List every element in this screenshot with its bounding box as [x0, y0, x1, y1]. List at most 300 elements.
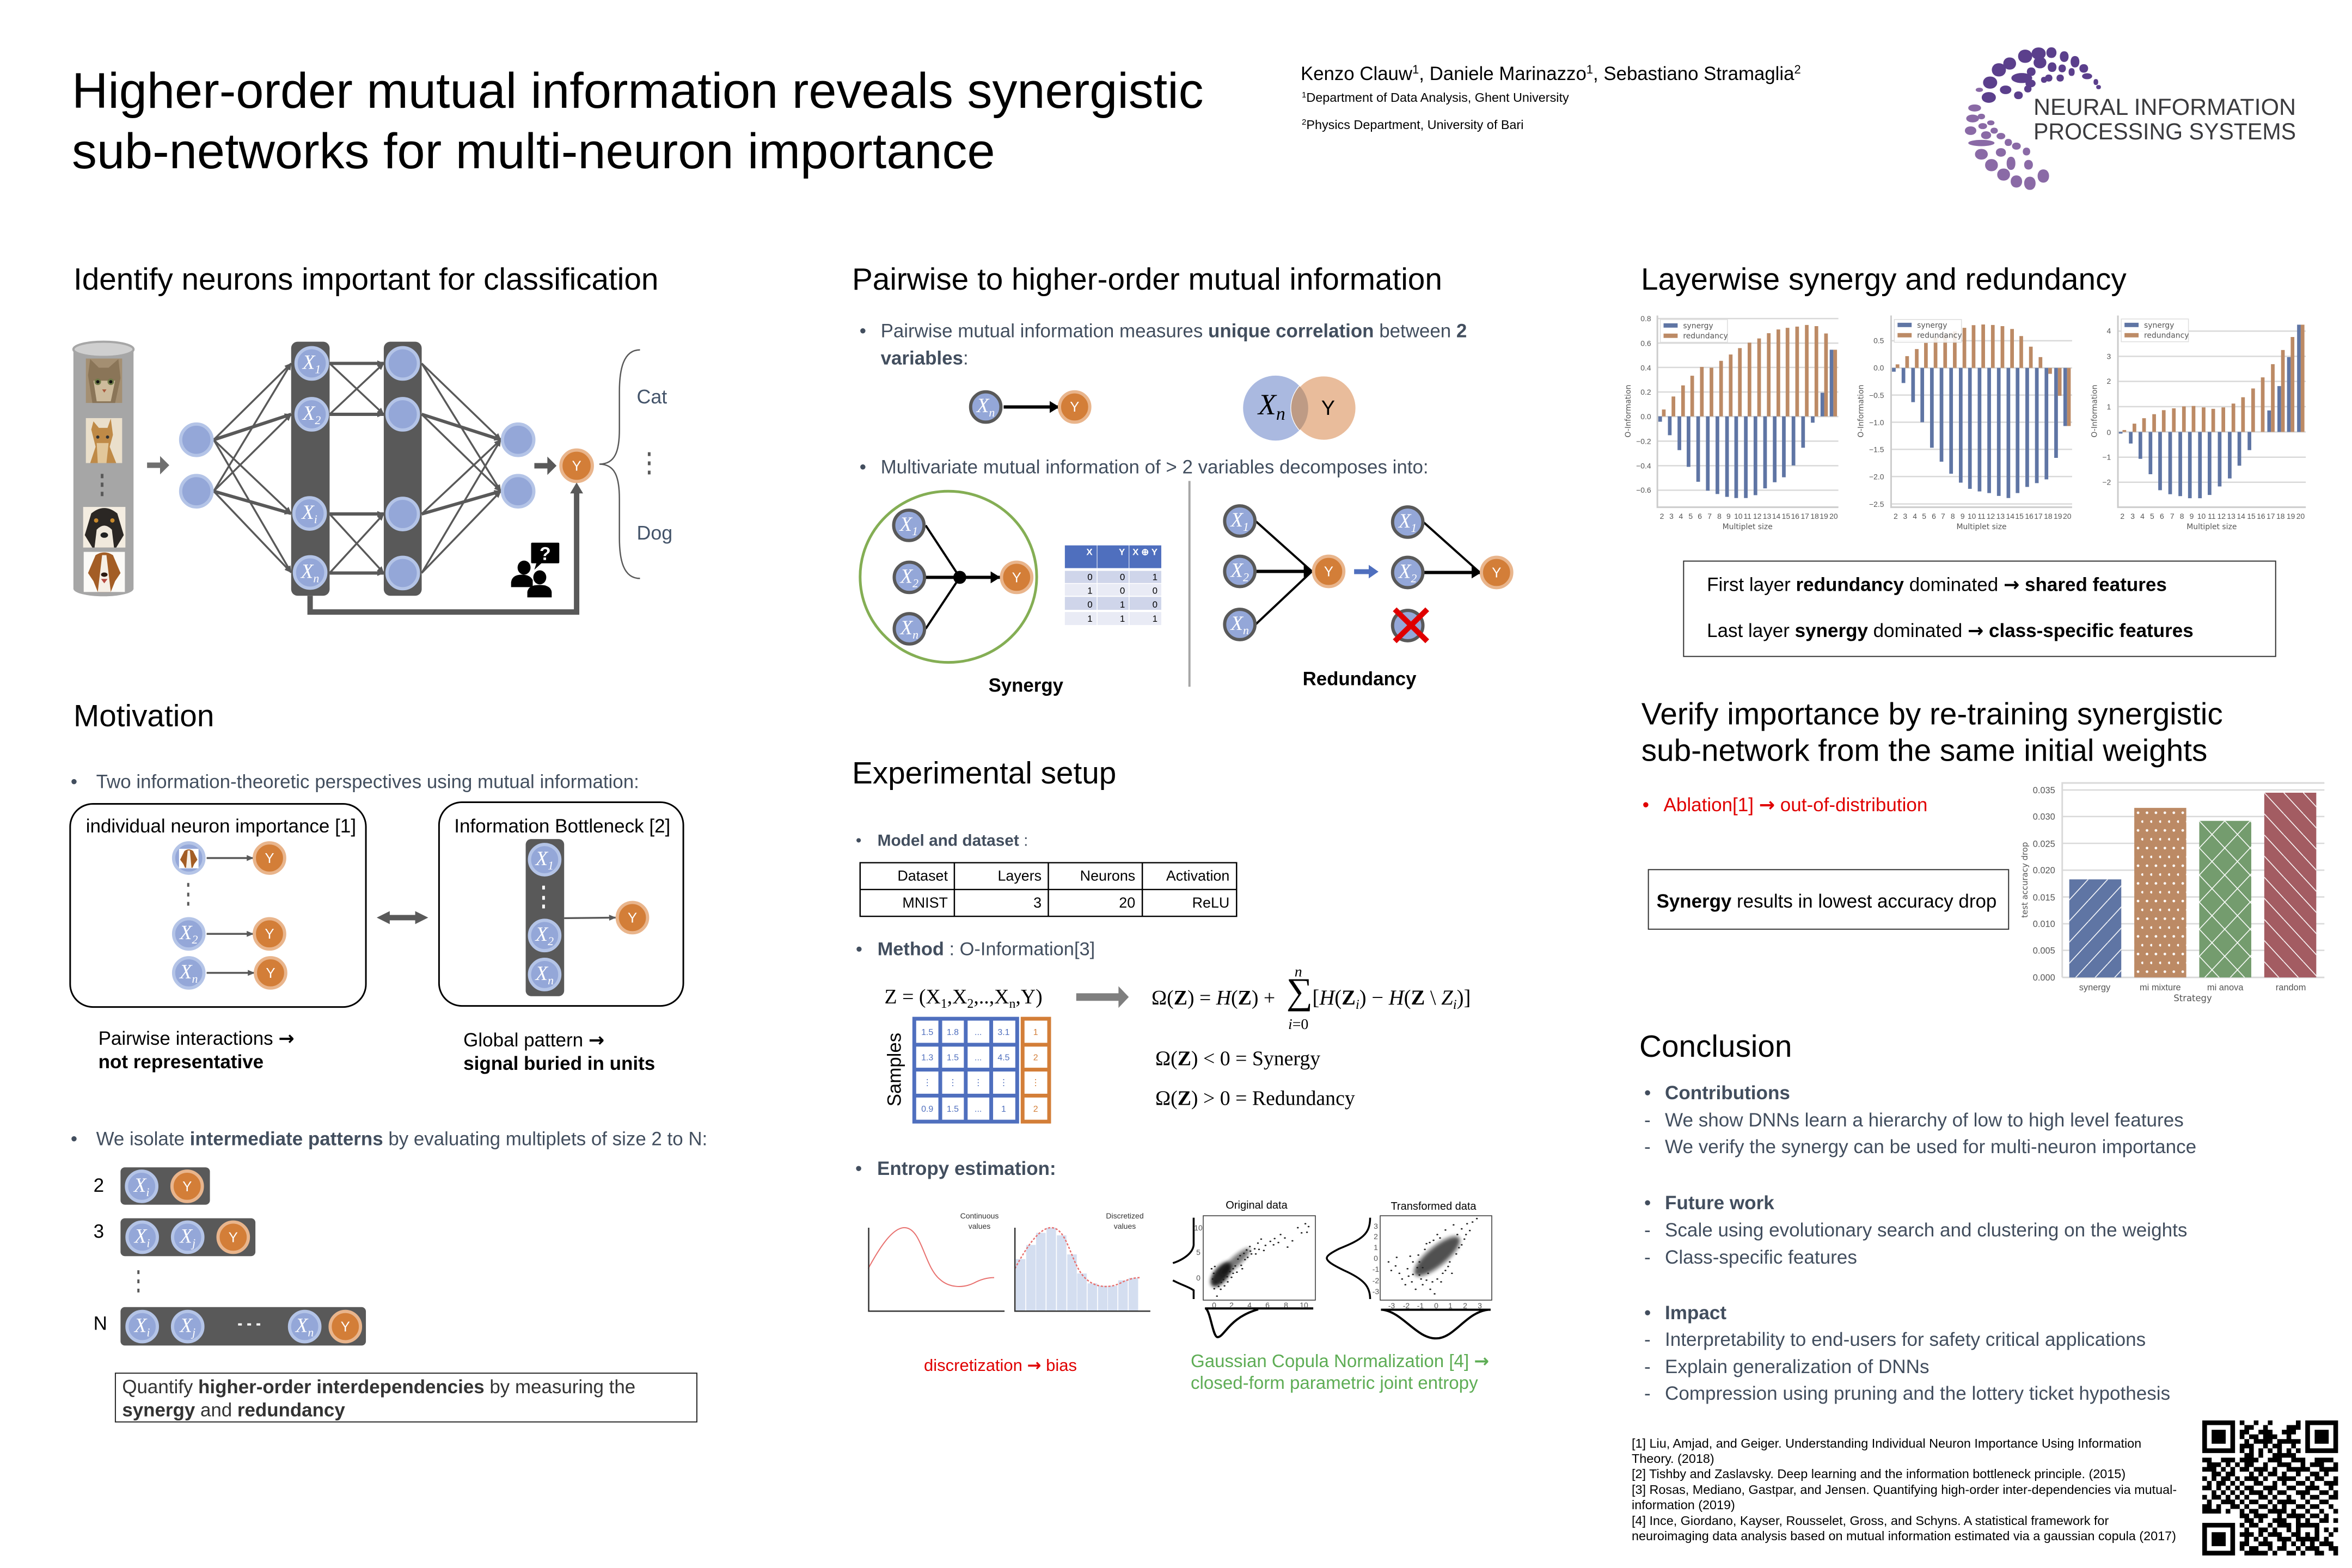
chart: layer 2 o-information: 4 — [1913, 512, 1917, 520]
text: global pattern note: Global pattern → — [463, 1029, 604, 1051]
image: dog 2 — [84, 552, 125, 592]
chart: gaussian copula transformed: -2 — [1403, 1301, 1410, 1310]
text: pairwise note: Pairwise interactions → — [99, 1027, 295, 1050]
table: model: MNIST — [902, 895, 948, 911]
arrow: blue — [1354, 565, 1379, 578]
text: impact — [1644, 1302, 2170, 1404]
dots — [137, 1270, 139, 1293]
text: impact: - — [1644, 1383, 1651, 1404]
layer 1 nodes: i — [314, 513, 317, 526]
diagram: pairwise link: Y — [1070, 400, 1079, 415]
diagram: synergy: X — [901, 616, 912, 639]
diagram: venn: X — [1258, 388, 1276, 421]
callout: synergy lowest drop: Synergy results in lowest accuracy drop — [1657, 891, 1996, 912]
references: [3] Rosas, Mediano, Gastpar, and Jensen. Quantifying high-order inter-dependencies via mutual- — [1632, 1483, 2177, 1497]
references: [4] Ince, Giordano, Kayser, Rousselet, Gross, and Schyns. A statistical framework for — [1632, 1514, 2109, 1528]
chart: layer 2 o-information: 15 — [2015, 512, 2024, 520]
chart: layer 2 o-information: −2.5 — [1869, 500, 1884, 509]
chart: layer 2 o-information: 8 — [1951, 512, 1955, 520]
legend: redundancy — [2144, 332, 2189, 340]
chart: gaussian copula original: 4 — [1247, 1301, 1252, 1309]
chart: accuracy drop by strategy — [2020, 783, 2324, 1003]
chart: layer 1 o-information: 0.0 — [1640, 412, 1651, 421]
authors and affiliations: Kenzo Clauw — [1301, 63, 1412, 84]
layer 1 nodes: X — [303, 351, 315, 373]
text: impact: Explain generalization of DNNs — [1665, 1356, 1930, 1377]
text: method: • — [856, 939, 862, 960]
chart: accuracy drop by strategy: mi anova — [2207, 983, 2244, 993]
callout: synergy lowest drop — [1649, 869, 2008, 929]
chart: layer 3 o-information: 18 — [2276, 512, 2285, 520]
multiplet row: N: X — [180, 1314, 192, 1337]
text: pairwise mutual information — [860, 321, 1467, 369]
chart: layer 3 o-information: 19 — [2287, 512, 2295, 520]
note: discretization bias: discretization → bias — [924, 1356, 1077, 1375]
chart: gaussian copula original: 10 — [1194, 1223, 1203, 1232]
text: contributions: We show DNNs learn a hierarchy of low to high level features — [1665, 1110, 2184, 1131]
table: model — [860, 863, 1236, 916]
edges between layers — [214, 363, 501, 573]
chart: layer 2 o-information: 13 — [1996, 512, 2005, 520]
chart: discretization: Discretized — [1106, 1211, 1144, 1220]
authors and affiliations: , Sebastiano Stramaglia — [1593, 63, 1794, 84]
arrow: double headed — [377, 911, 428, 924]
chart: layer 1 o-information: O-Information — [1624, 385, 1633, 437]
output nodes — [503, 424, 534, 507]
diagram: venn: Y — [1321, 397, 1335, 420]
chart: layer 1 o-information: 19 — [1820, 512, 1828, 520]
diagram: synergy: X — [901, 565, 912, 587]
chart: layer 3 o-information: 4 — [2140, 512, 2145, 520]
text: entropy estimation: Entropy estimation: — [877, 1158, 1056, 1179]
chart: gaussian copula original: 2 — [1229, 1301, 1234, 1309]
note: gaussian copula: Gaussian Copula Normalization [4] → — [1191, 1350, 1489, 1371]
diagram: synergy — [860, 491, 1037, 663]
multiplet row: 2: Y — [182, 1179, 192, 1195]
chart: gaussian copula transformed — [1327, 1200, 1492, 1338]
callout: layer findings — [1683, 561, 2276, 657]
label: dog: Dog — [637, 522, 672, 544]
chart: layer 2 o-information: 11 — [1977, 512, 1986, 520]
data matrix: 1.5 — [947, 1054, 959, 1063]
chart: accuracy drop by strategy: 0.000 — [2033, 973, 2055, 983]
chart: layer 1 o-information: −0.4 — [1636, 461, 1651, 470]
text: entropy estimation: • — [855, 1158, 862, 1179]
diagram: redundancy after — [1393, 507, 1512, 641]
text: ablation: Ablation[1] → out-of-distribution — [1664, 794, 1927, 816]
chart: layer 1 o-information: 5 — [1688, 512, 1693, 520]
table: model: Neurons — [1080, 867, 1135, 884]
chart: layer 2 o-information: 3 — [1903, 512, 1907, 520]
multiplet row: N: X — [296, 1314, 308, 1337]
chart: layer 1 o-information: 11 — [1744, 512, 1751, 520]
row: X2: 2 — [192, 933, 198, 946]
chart: gaussian copula transformed: -2 — [1373, 1276, 1379, 1285]
table: XOR truth table: 1 — [1153, 572, 1157, 582]
references: information (2019) — [1632, 1498, 1735, 1512]
chart: layer 1 o-information: 0.8 — [1640, 314, 1651, 323]
heading: motivation: Motivation — [74, 699, 214, 733]
multiplet row: N: i — [146, 1326, 150, 1339]
text: impact: - — [1644, 1356, 1651, 1377]
label: cat: Cat — [637, 386, 667, 408]
chart: layer 1 o-information: Multiplet size — [1723, 523, 1773, 531]
chart: layer 2 o-information: −1.5 — [1869, 445, 1884, 454]
chart: layer 3 o-information: 5 — [2150, 512, 2154, 520]
data matrix: 2 — [1033, 1054, 1038, 1063]
diagram: synergy: 2 — [912, 577, 918, 590]
note: gaussian copula: closed-form parametric joint entropy — [1191, 1373, 1478, 1393]
formula: Z definition: 1 — [941, 997, 947, 1011]
chart: gaussian copula transformed: 0 — [1374, 1254, 1378, 1263]
text: impact: Impact — [1665, 1302, 1726, 1324]
row: X2: Y — [265, 927, 274, 942]
chart: layer 3 o-information: O-Information — [2090, 385, 2099, 437]
text: multivariate: • — [860, 456, 866, 477]
data matrix: 1.5 — [921, 1028, 933, 1037]
chart: gaussian copula transformed: 1 — [1374, 1243, 1378, 1252]
layer 1 nodes — [294, 348, 327, 588]
text: contributions: Contributions — [1665, 1082, 1790, 1104]
layer 1 nodes: X — [301, 560, 313, 582]
chart: layer 3 o-information: 9 — [2190, 512, 2194, 520]
multiplet row: N: j — [191, 1326, 195, 1339]
chart: gaussian copula original: 0 — [1212, 1301, 1216, 1309]
chart: layer 1 o-information: 3 — [1669, 512, 1674, 520]
arrow: input to network — [147, 456, 169, 474]
row: image neuron — [174, 843, 285, 873]
diagram: redundancy before: X — [1231, 612, 1243, 634]
chart: accuracy drop by strategy: test accuracy drop — [2020, 842, 2030, 918]
text: pairwise mutual information: • — [860, 321, 866, 342]
title — [72, 63, 1204, 179]
chart: layer 2 o-information: 9 — [1961, 512, 1965, 520]
table: XOR truth table: Y — [1119, 547, 1125, 558]
formula: O-information — [1152, 963, 1471, 1033]
data matrix: ⋮ — [948, 1078, 957, 1087]
chart: layer 3 o-information: 2 — [2107, 377, 2111, 385]
chart: gaussian copula transformed: -1 — [1417, 1301, 1424, 1310]
authors and affiliations: Physics Department, University of Bari — [1306, 118, 1523, 132]
callout: layer findings: First layer redundancy dominated → shared features — [1707, 573, 2167, 596]
chart: layer 2 o-information: 0.5 — [1873, 336, 1884, 345]
layer 2 nodes — [387, 348, 419, 589]
chart: layer 3 o-information: 20 — [2296, 512, 2305, 520]
references: [2] Tishby and Zaslavsky. Deep learning and the information bottleneck principle. (2015) — [1632, 1467, 2126, 1481]
chart: accuracy drop by strategy: 0.010 — [2033, 920, 2055, 929]
authors and affiliations: Department of Data Analysis, Ghent University — [1306, 90, 1569, 105]
layer 1 nodes: 2 — [315, 414, 321, 427]
chart: accuracy drop by strategy: random — [2276, 983, 2306, 993]
data matrix: 3.1 — [997, 1028, 1010, 1037]
logo: neural information processing systems — [1966, 47, 2296, 189]
chart: layer 2 o-information: 0.0 — [1873, 363, 1884, 372]
formula: Z definition: n — [1009, 997, 1015, 1011]
chart: layer 1 o-information: 6 — [1698, 512, 1702, 520]
data matrix: ⋮ — [999, 1078, 1008, 1087]
chart: layer 3 o-information: 1 — [2107, 402, 2111, 411]
text: method: Method : O-Information[3] — [878, 939, 1095, 960]
chart: layer 1 o-information: 16 — [1791, 512, 1799, 520]
data matrix: 4.5 — [997, 1054, 1010, 1063]
chart: discretization — [868, 1211, 1150, 1311]
formula: Z definition: ,X — [947, 985, 967, 1008]
row: X2: X — [180, 921, 192, 944]
row: Xn: n — [192, 972, 198, 985]
diagram: synergy: n — [912, 628, 918, 641]
formula: O-information: ∑ — [1287, 971, 1313, 1012]
text: pairwise mutual information: variables — [881, 347, 963, 369]
legend — [2121, 319, 2189, 342]
heading: verify importance: Verify importance by re-training synergistic — [1641, 697, 2223, 732]
multiplet row: 3: 3 — [94, 1221, 104, 1242]
chart: layer 1 o-information: 9 — [1726, 512, 1731, 520]
chart: layer 3 o-information: −1 — [2102, 453, 2111, 462]
multiplet row: 2: X — [134, 1174, 146, 1196]
formula: Z definition: ,Y) — [1015, 985, 1043, 1008]
references: neuroimaging data analysis based on mutual information estimated via a gaussian copula (2017) — [1632, 1529, 2176, 1543]
text: pairwise mutual information: Pairwise mutual information measures unique correlation between 2 — [881, 321, 1467, 342]
chart: gaussian copula original: Original data — [1226, 1199, 1288, 1211]
text: impact: • — [1644, 1302, 1651, 1324]
authors and affiliations: 1 — [1412, 63, 1419, 76]
table: XOR truth table: X — [1086, 547, 1093, 558]
data matrix: 2 — [1033, 1105, 1038, 1114]
chart: layer 2 o-information: −0.5 — [1869, 391, 1884, 400]
chart: layer 1 o-information: 8 — [1717, 512, 1722, 520]
multiplet row: N — [94, 1307, 366, 1345]
text: contributions: • — [1644, 1082, 1651, 1104]
chart: gaussian copula transformed: 0 — [1434, 1301, 1438, 1310]
table: XOR truth table: 1 — [1153, 614, 1157, 624]
qr code — [2202, 1420, 2338, 1555]
label: synergy: Synergy — [989, 675, 1064, 696]
formula: O-information: ) − — [1359, 987, 1389, 1009]
chart: layer 3 o-information: −2 — [2102, 477, 2111, 486]
chart: layer 2 o-information: 7 — [1941, 512, 1945, 520]
chart: layer 1 o-information — [1624, 314, 1839, 531]
multiplet row: 3 — [94, 1218, 255, 1256]
data matrix: ... — [975, 1105, 982, 1114]
text: future work: Future work — [1665, 1192, 1774, 1214]
chart: layer 2 o-information: 19 — [2054, 512, 2062, 520]
text: impact: Interpretability to end-users for safety critical applications — [1665, 1329, 2146, 1350]
text: future work: Class-specific features — [1665, 1247, 1857, 1268]
diagram: redundancy before: Y — [1324, 564, 1333, 579]
table: XOR truth table: 0 — [1087, 572, 1093, 582]
callout: layer findings: Last layer synergy dominated → class-specific features — [1707, 620, 2194, 642]
diagram: redundancy before: X — [1231, 559, 1243, 581]
row: Xn — [174, 958, 286, 988]
panel: information bottleneck: 2 — [548, 935, 554, 948]
chart: layer 3 o-information: 16 — [2257, 512, 2265, 520]
chart: accuracy drop by strategy: 0.030 — [2033, 812, 2055, 822]
formula: Z definition: ,..,X — [973, 985, 1009, 1008]
chart: layer 1 o-information: 20 — [1829, 512, 1838, 520]
legend: synergy — [2144, 321, 2174, 330]
formula: O-information: )] — [1457, 987, 1471, 1009]
chart: discretization: values — [969, 1222, 990, 1230]
chart: layer 2 o-information: 2 — [1894, 512, 1898, 520]
references — [1632, 1436, 2177, 1543]
chart: layer 3 o-information: Multiplet size — [2186, 523, 2237, 531]
table: model: Layers — [997, 867, 1042, 884]
formula: O-information: i=0 — [1288, 1016, 1308, 1033]
layer bar 1 — [291, 342, 329, 596]
chart: accuracy drop by strategy: 0.025 — [2033, 839, 2055, 849]
chart: layer 3 o-information: 3 — [2107, 352, 2111, 360]
legend — [1661, 320, 1728, 342]
data matrix: ⋮ — [923, 1078, 932, 1087]
arrow: to formula — [1076, 986, 1129, 1008]
data matrix: ... — [975, 1028, 982, 1037]
diagram: redundancy after: X — [1399, 560, 1411, 582]
text: future work: - — [1644, 1247, 1651, 1268]
diagram: synergy: Y — [1012, 570, 1021, 585]
diagram: redundancy after: 2 — [1411, 572, 1417, 585]
text: model and dataset: Model and dataset : — [878, 832, 1028, 850]
legend: redundancy — [1683, 332, 1728, 341]
chart: gaussian copula transformed: 3 — [1478, 1301, 1482, 1310]
legend: synergy — [1917, 321, 1947, 330]
chart: layer 2 o-information: 16 — [2025, 512, 2033, 520]
chart: gaussian copula original: 5 — [1196, 1248, 1200, 1257]
heading: conclusion: Conclusion — [1639, 1030, 1792, 1064]
text: model and dataset: • — [856, 832, 861, 850]
chart: layer 1 o-information: 18 — [1810, 512, 1819, 520]
callout: quantify: Quantify higher-order interdependencies by measuring the — [122, 1376, 635, 1398]
diagram: redundancy after: X — [1399, 510, 1411, 532]
data matrix: ⋮ — [1031, 1078, 1040, 1087]
icon: people with question — [511, 543, 559, 597]
arrow: feedback from neuron to Y — [310, 482, 583, 612]
data matrix: 1.3 — [921, 1054, 933, 1063]
authors and affiliations: 2 — [1794, 63, 1801, 76]
panel: information bottleneck: X — [536, 962, 548, 984]
multiplet row: 3: X — [180, 1224, 192, 1247]
data matrix: 1.5 — [947, 1105, 959, 1114]
text: pairwise mutual information: : — [963, 347, 969, 369]
table: XOR truth table: 0 — [1120, 585, 1125, 596]
authors and affiliations: , Daniele Marinazzo — [1419, 63, 1587, 84]
text: pairwise note: not representative — [99, 1051, 264, 1073]
authors and affiliations — [1301, 63, 1801, 132]
diagram: venn — [1243, 376, 1356, 440]
data matrix: ... — [975, 1054, 982, 1063]
bar: synergy — [2069, 879, 2121, 977]
text: future work: - — [1644, 1220, 1651, 1241]
text: ablation: • — [1643, 794, 1649, 816]
chart: layer 1 o-information: 12 — [1753, 512, 1762, 520]
chart: gaussian copula transformed: 3 — [1374, 1222, 1378, 1230]
chart: layer 3 o-information: 17 — [2267, 512, 2275, 520]
diagram: synergy: 1 — [912, 525, 918, 538]
diagram: redundancy before: n — [1243, 624, 1249, 637]
heading: verify importance — [1641, 697, 2223, 768]
authors and affiliations: 1 — [1587, 63, 1593, 76]
chart: layer 1 o-information: 15 — [1782, 512, 1790, 520]
diagram: redundancy before: 2 — [1243, 571, 1249, 584]
chart: gaussian copula transformed: 2 — [1374, 1232, 1378, 1241]
formula: O-information: n — [1295, 963, 1302, 980]
layer 1 nodes: n — [313, 572, 319, 585]
text: contributions: - — [1644, 1110, 1651, 1131]
table: XOR truth table: 1 — [1120, 599, 1125, 610]
brace — [599, 350, 640, 578]
multiplet row: N: n — [308, 1326, 314, 1339]
chart: layer 1 o-information: 10 — [1734, 512, 1743, 520]
references: [1] Liu, Amjad, and Geiger. Understanding Individual Neuron Importance Using Information — [1632, 1436, 2141, 1450]
multiplet row: 2: 2 — [94, 1175, 104, 1196]
table: model: Activation — [1166, 867, 1229, 884]
diagram: redundancy before — [1224, 506, 1344, 640]
text: future work: Scale using evolutionary search and clustering on the weights — [1665, 1220, 2187, 1241]
icon: people with question: ? — [540, 544, 551, 565]
diagram: redundancy before: X — [1231, 509, 1243, 531]
text: intermediate patterns: • — [71, 1128, 77, 1149]
data matrix — [914, 1019, 1049, 1122]
text: impact: - — [1644, 1329, 1651, 1350]
row: image neuron: Y — [265, 851, 274, 866]
panel: information bottleneck: X — [536, 847, 548, 869]
bar: random — [2264, 793, 2316, 977]
text: contributions — [1644, 1082, 2196, 1157]
chart: layer 1 o-information: 0.4 — [1640, 363, 1651, 372]
heading: layerwise synergy and redundancy: Layerwise synergy and redundancy — [1641, 262, 2127, 297]
legend — [1894, 320, 1962, 342]
title: sub-networks for multi-neuron importance — [72, 124, 995, 179]
layer 1 nodes: 1 — [315, 363, 321, 376]
chart: layer 2 o-information: 10 — [1968, 512, 1976, 520]
diagram: pairwise link: X — [977, 394, 989, 416]
table: model: 20 — [1119, 895, 1135, 911]
chart: accuracy drop by strategy: mi mixture — [2140, 983, 2181, 993]
arrow: to output Y — [534, 457, 556, 475]
heading: experimental setup: Experimental setup — [852, 756, 1116, 791]
chart: accuracy drop by strategy: 0.020 — [2033, 866, 2055, 875]
text: future work — [1644, 1192, 2187, 1268]
references: Theory. (2018) — [1632, 1451, 1714, 1466]
chart: layer 3 o-information: 4 — [2107, 327, 2111, 335]
chart: layer 2 o-information: −2.0 — [1869, 472, 1884, 481]
chart: layer 2 o-information: Multiplet size — [1956, 523, 2007, 531]
text: two perspectives: Two information-theoretic perspectives using mutual information: — [96, 771, 639, 793]
chart: layer 2 o-information: 20 — [2063, 512, 2072, 520]
table: model: 3 — [1033, 895, 1042, 911]
chart: layer 2 o-information: 18 — [2044, 512, 2053, 520]
chart: accuracy drop by strategy: 0.035 — [2033, 786, 2055, 795]
chart: layer 3 o-information: 12 — [2218, 512, 2226, 520]
logo: neural information processing systems: PROCESSING SYSTEMS — [2033, 119, 2296, 145]
chart: layer 3 o-information: 3 — [2130, 512, 2135, 520]
chart: layer 2 o-information: 17 — [2034, 512, 2043, 520]
chart: layer 3 o-information: 15 — [2247, 512, 2256, 520]
authors and affiliations: 2 — [1302, 118, 1306, 127]
legend: synergy — [1683, 322, 1713, 330]
chart: gaussian copula transformed: -3 — [1388, 1301, 1395, 1310]
row: Xn: Y — [266, 966, 275, 981]
panel: information bottleneck: Y — [628, 910, 637, 926]
chart: accuracy drop by strategy: 0.015 — [2033, 893, 2055, 903]
chart: layer 1 o-information: −0.6 — [1636, 486, 1651, 494]
table: XOR truth table: 1 — [1087, 585, 1093, 596]
panel: information bottleneck: n — [548, 974, 554, 987]
logo: neural information processing systems: NEURAL INFORMATION — [2033, 94, 2296, 120]
row: X2 — [174, 918, 285, 949]
chart: layer 1 o-information: 14 — [1772, 512, 1780, 520]
chart: layer 1 o-information: 0.6 — [1640, 339, 1651, 348]
input nodes — [181, 424, 212, 507]
